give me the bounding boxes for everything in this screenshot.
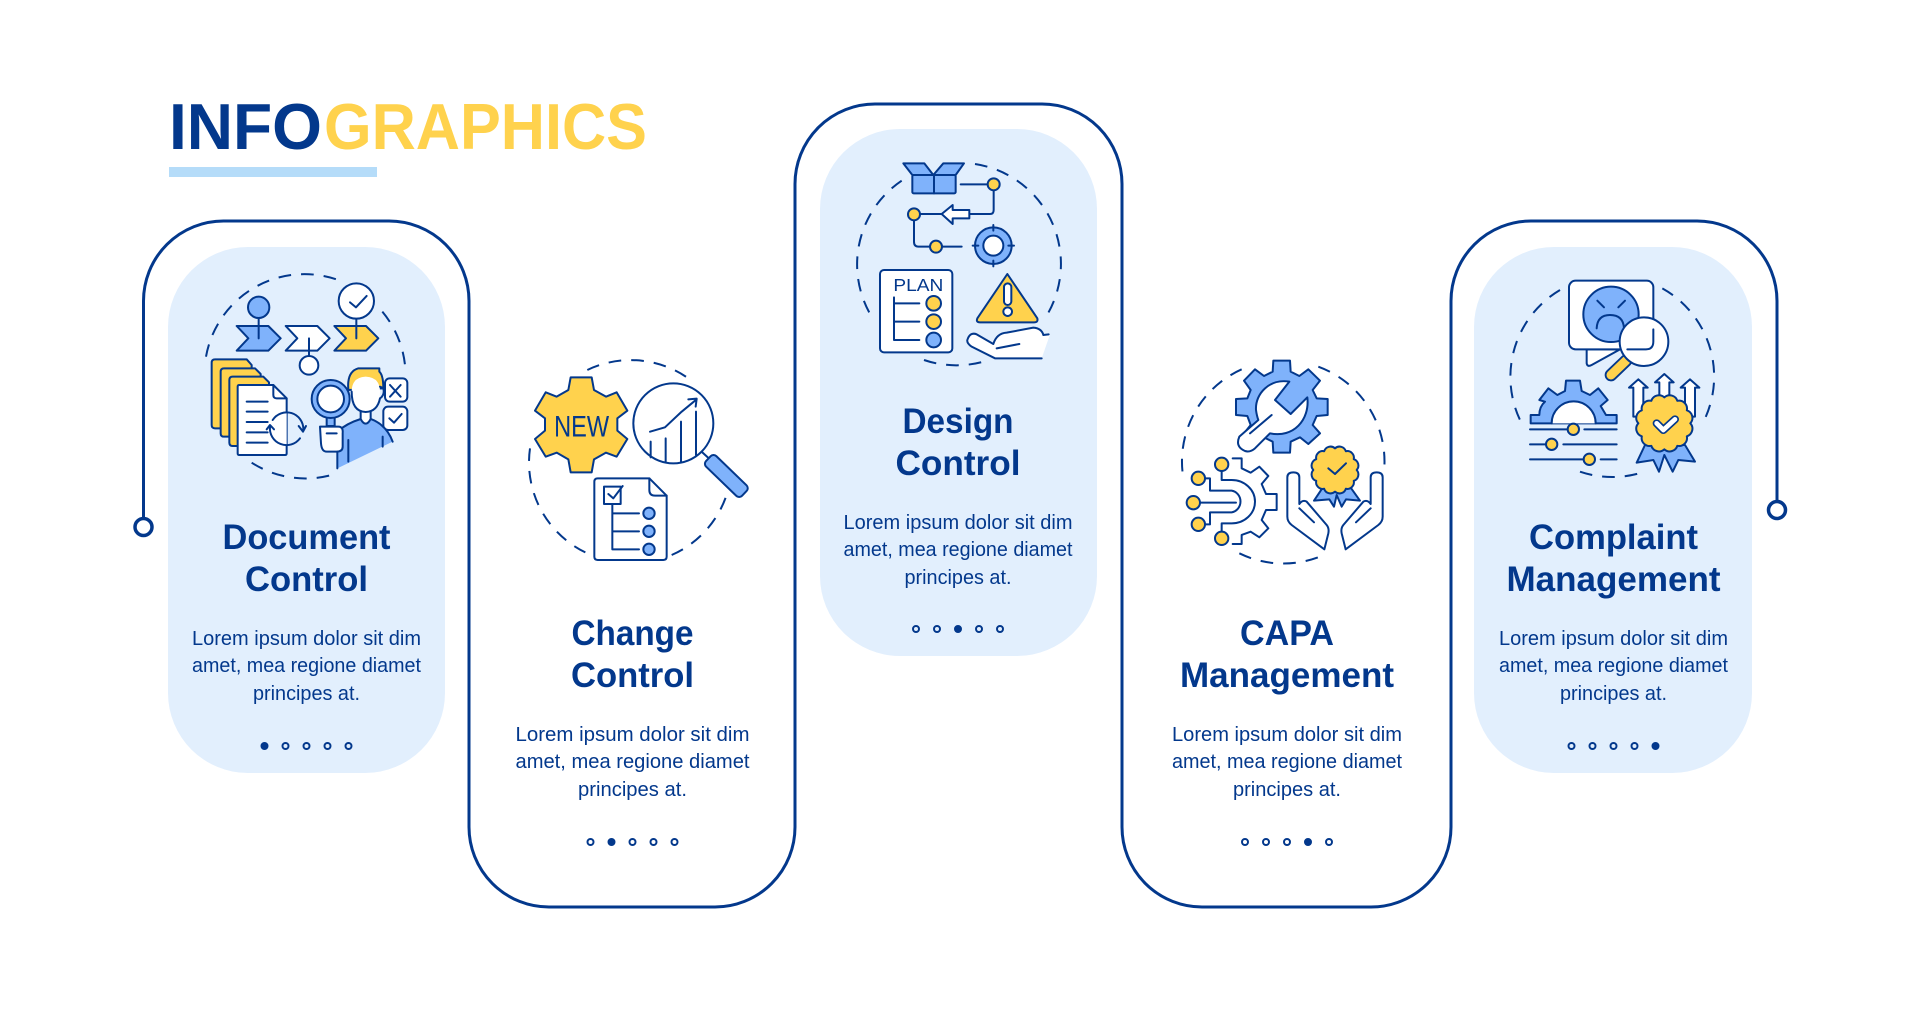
icon: change control — [529, 360, 749, 560]
heading: Design — [902, 402, 1014, 441]
body text: Lorem ipsum dolor sit dim — [844, 511, 1072, 534]
pagination dots — [588, 838, 678, 846]
body text — [1172, 723, 1402, 801]
body text: Lorem ipsum dolor sit dim — [1499, 627, 1728, 650]
body text: Lorem ipsum dolor sit dim — [516, 723, 750, 746]
heading: Change — [572, 614, 694, 653]
connector: snake outline across all columns — [144, 104, 1777, 907]
body text: Lorem ipsum dolor sit dim — [192, 627, 421, 650]
pagination dots — [1568, 742, 1659, 750]
body text: principes at. — [904, 566, 1012, 589]
body text: principes at. — [253, 682, 360, 705]
title underline — [169, 167, 377, 177]
column: CAPA Management — [1172, 361, 1402, 846]
body text: amet, mea regione diamet — [516, 750, 750, 773]
title: GRAPHICS — [324, 90, 647, 163]
pagination dots — [913, 626, 1003, 632]
body text — [844, 511, 1073, 589]
pagination dots — [261, 742, 352, 750]
column: Design Control — [844, 163, 1073, 632]
panel: Document Control background — [168, 247, 445, 773]
heading: Control — [896, 444, 1020, 483]
body text: amet, mea regione diamet — [1499, 654, 1728, 677]
column: Change Control — [516, 360, 750, 846]
body text — [1499, 627, 1728, 705]
panel: Complaint Management background — [1474, 247, 1752, 773]
icon: change control: NEW — [554, 411, 610, 444]
icon: document control — [206, 274, 407, 478]
pagination dots — [1242, 838, 1332, 846]
icon: CAPA management — [1182, 361, 1385, 563]
title: INFO — [169, 90, 322, 163]
body text: principes at. — [578, 778, 687, 801]
icon: complaint management — [1510, 281, 1714, 477]
heading — [1506, 518, 1721, 599]
icon: design control — [857, 163, 1061, 365]
body text: amet, mea regione diamet — [1172, 750, 1402, 773]
body text: principes at. — [1233, 778, 1341, 801]
icon: design control: PLAN — [893, 275, 943, 295]
connector end circle — [1768, 502, 1786, 518]
panel: Design Control background — [820, 129, 1097, 656]
body text — [516, 723, 750, 801]
column: Document Control — [192, 274, 421, 750]
title — [169, 90, 647, 163]
heading — [222, 518, 391, 599]
heading: Complaint — [1529, 518, 1698, 557]
body text: amet, mea regione diamet — [844, 538, 1073, 561]
heading: Control — [571, 656, 694, 695]
body text: Lorem ipsum dolor sit dim — [1172, 723, 1402, 746]
heading — [571, 614, 694, 695]
heading: Management — [1180, 656, 1394, 695]
heading: Document — [222, 518, 391, 557]
heading: CAPA — [1240, 614, 1334, 653]
body text: principes at. — [1560, 682, 1667, 705]
heading: Management — [1506, 560, 1721, 599]
connector start circle — [135, 518, 152, 536]
heading — [1180, 614, 1394, 695]
heading: Control — [245, 560, 368, 599]
body text: amet, mea regione diamet — [192, 654, 421, 677]
body text — [192, 627, 421, 705]
column: Complaint Management — [1499, 281, 1728, 750]
heading — [896, 402, 1020, 483]
